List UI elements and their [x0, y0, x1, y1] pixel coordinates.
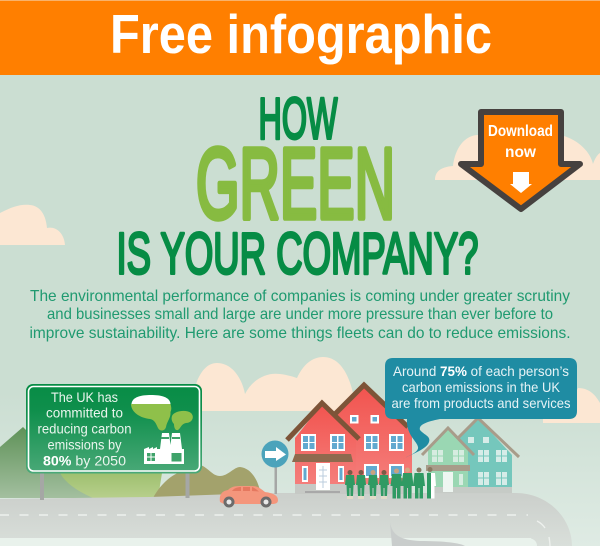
- person: [356, 470, 366, 499]
- billboard text: committed to: [46, 406, 123, 420]
- banner: Free infographic: [110, 3, 492, 65]
- person: [345, 470, 355, 499]
- road: [0, 493, 572, 546]
- billboard text: The UK has: [51, 390, 118, 405]
- hills: [0, 427, 262, 498]
- speech bubble: are from products and services: [392, 395, 570, 411]
- icon: small down arrow: [510, 172, 532, 193]
- title: [116, 86, 478, 286]
- banner: [0, 0, 600, 75]
- green house: [422, 428, 474, 493]
- intro text: [30, 288, 570, 342]
- cloud: behind houses: [190, 357, 356, 411]
- title line: how: HOW: [258, 86, 338, 152]
- intro text: The environmental performance of companies is coming under greater scrutiny: [30, 288, 570, 305]
- download arrow: now: [505, 144, 537, 161]
- teal house: [452, 418, 519, 493]
- billboard text: [38, 390, 132, 468]
- download arrow: [461, 112, 580, 209]
- cloud: top right: [435, 135, 600, 180]
- person: [368, 470, 378, 499]
- people: [345, 467, 436, 499]
- intro text: and businesses small and large are under more pressure than ever before to: [47, 306, 553, 323]
- speech bubble: carbon emissions in the UK: [402, 379, 561, 395]
- cloud: right: [543, 388, 600, 423]
- person: [390, 468, 402, 498]
- person: [402, 468, 414, 498]
- icon: factory with smoke: [131, 395, 193, 464]
- speech bubble: Around 75% of each person’s: [393, 363, 569, 379]
- billboard text: 80% by 2050: [43, 454, 126, 468]
- person: [413, 468, 425, 498]
- person: [427, 467, 436, 498]
- speech bubble: [385, 358, 577, 459]
- billboard text: reducing carbon: [38, 422, 132, 436]
- download arrow: Download: [488, 123, 553, 140]
- cloud: left: [0, 205, 65, 245]
- person: [379, 470, 389, 499]
- houses: teal and green: [422, 418, 519, 493]
- billboard text: emissions by: [48, 438, 122, 452]
- billboard: [26, 384, 202, 500]
- title line: green: GREEN: [196, 128, 395, 240]
- road sign: direction arrow: [262, 440, 288, 494]
- car: [220, 486, 278, 508]
- intro text: improve sustainability. Here are some things fleets can do to reduce emissions.: [30, 325, 570, 342]
- houses: red: [287, 385, 412, 494]
